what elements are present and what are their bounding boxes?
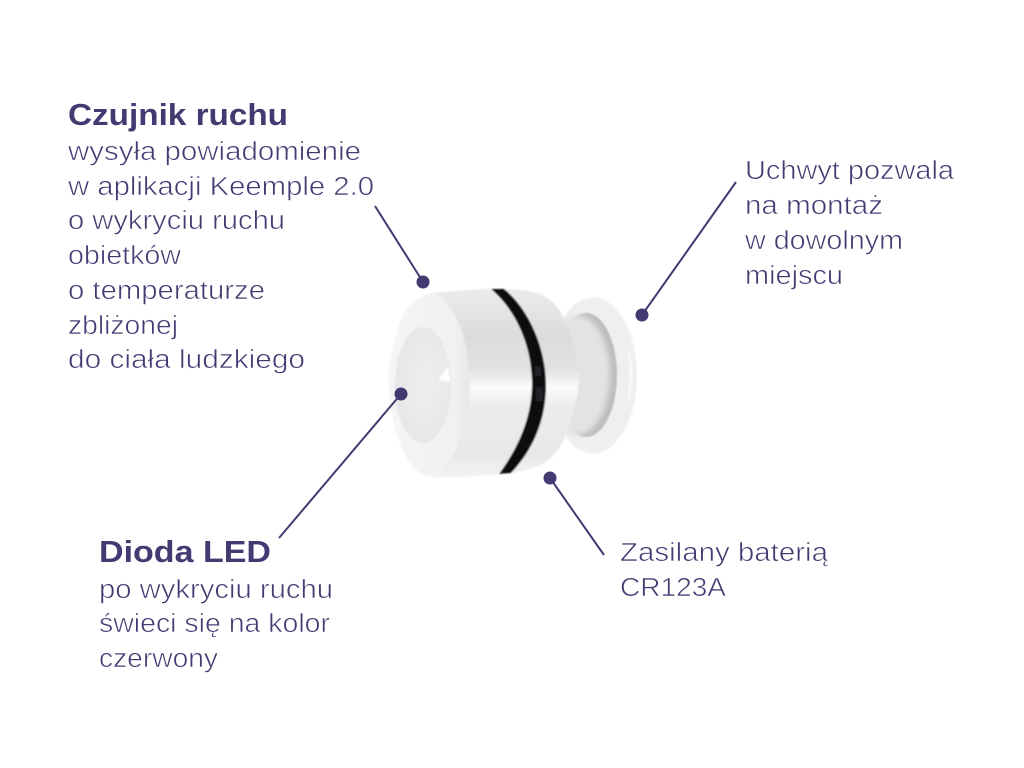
sensor body <box>432 289 579 478</box>
mount plate <box>544 298 637 454</box>
text block: motion sensor description: w aplikacji Keemple 2.0 <box>67 173 374 201</box>
callout: LED line and dot <box>279 388 408 538</box>
text block: motion sensor description: o temperaturze <box>68 277 265 305</box>
black band <box>491 289 546 474</box>
lens highlight <box>438 366 450 382</box>
text block: motion sensor description: obietków <box>68 242 182 270</box>
text block: LED description: po wykryciu ruchu <box>99 576 333 604</box>
text block: mount description: Uchwyt pozwala <box>745 157 955 185</box>
text block: motion sensor description: zbliżonej <box>68 312 178 340</box>
text block: motion sensor description: do ciała ludzkiego <box>68 346 305 374</box>
callout: motion sensor line and dot <box>375 206 430 288</box>
text block: motion sensor description <box>67 138 374 374</box>
sensor lens <box>395 327 451 443</box>
text block: mount description <box>744 157 955 290</box>
callout: mount line and dot <box>636 182 736 322</box>
text block: LED description: świeci się na kolor <box>99 610 331 638</box>
text block: battery description: Zasilany baterią <box>620 539 829 567</box>
front ring <box>388 293 470 477</box>
callout: battery line and dot <box>544 472 604 555</box>
product: motion sensor device <box>388 289 637 478</box>
text block: mount description: w dowolnym <box>744 227 903 255</box>
text block: LED description <box>99 576 333 673</box>
heading: Dioda LED: Dioda LED <box>99 534 271 569</box>
text block: battery description <box>620 539 829 602</box>
band details <box>535 366 543 401</box>
text block: mount description: na montaż <box>745 192 883 220</box>
text block: motion sensor description: o wykryciu ruchu <box>68 207 285 235</box>
text block: mount description: miejscu <box>745 262 843 290</box>
text block: LED description: czerwony <box>99 645 218 673</box>
text block: motion sensor description: wysyła powiadomienie <box>67 138 361 166</box>
text block: battery description: CR123A <box>620 574 726 602</box>
heading: Czujnik ruchu: Czujnik ruchu <box>68 97 288 132</box>
